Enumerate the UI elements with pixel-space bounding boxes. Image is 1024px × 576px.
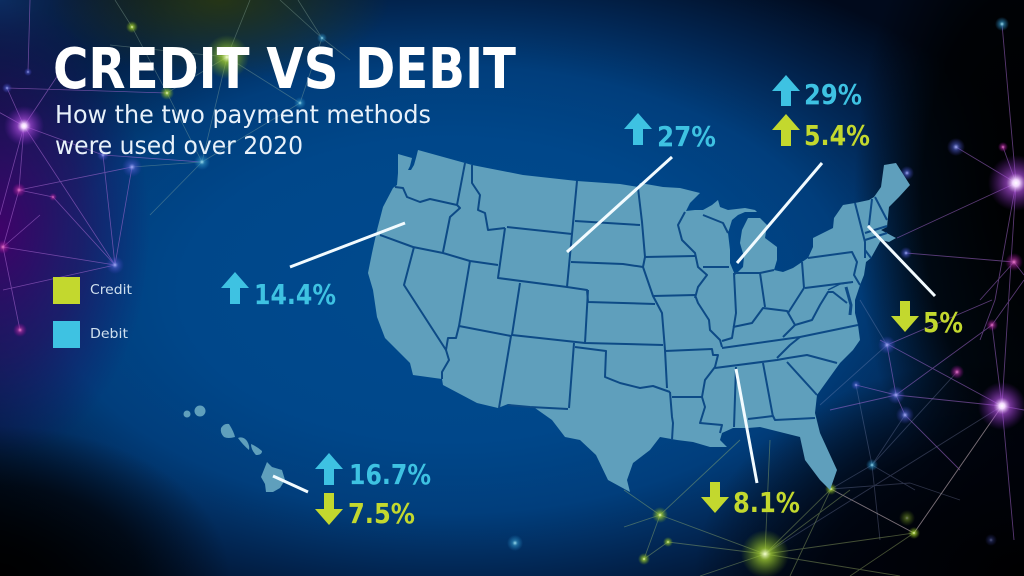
legend [53,277,132,348]
stat: Great Lakes debit up 29% [772,75,862,111]
title: CREDIT VS DEBIT [53,37,516,102]
legend: credit: Credit [90,282,132,298]
stat: Great Lakes credit up 5.4%: 5.4% [804,119,870,152]
stat: Hawaii debit up 16.7%: 16.7% [349,458,431,491]
stat: Midwest debit up 27% [624,113,716,153]
stat: Hawaii debit up 16.7% [315,453,431,491]
subtitle: were used over 2020 [55,131,303,160]
map: continental US [368,150,910,492]
stat: South credit down 8.1%: 8.1% [733,486,800,519]
stat: Hawaii credit down 7.5%: 7.5% [348,497,415,530]
stat: West debit up 14.4%: 14.4% [254,278,336,311]
state borders [380,163,887,440]
leader lines [273,157,935,492]
stat: Great Lakes debit up 29%: 29% [804,78,862,111]
subtitle: How the two payment methods [55,100,431,129]
stat: South credit down 8.1% [701,482,800,519]
map: Hawaii islands [184,406,285,492]
subtitle [55,100,431,160]
US landmass [368,150,910,492]
network pattern: top-left [0,0,350,330]
stat: Great Lakes credit up 5.4% [772,114,870,152]
stat: Hawaii credit down 7.5% [315,493,415,530]
legend: debit: Debit [90,326,128,342]
stat: Northeast credit down 5%: 5% [923,306,963,339]
network pattern: right [765,24,1024,554]
stat: Northeast credit down 5% [891,301,963,339]
stat: West debit up 14.4% [221,272,336,311]
network pattern: bottom green [624,406,1002,576]
stat: Midwest debit up 27%: 27% [657,120,716,153]
